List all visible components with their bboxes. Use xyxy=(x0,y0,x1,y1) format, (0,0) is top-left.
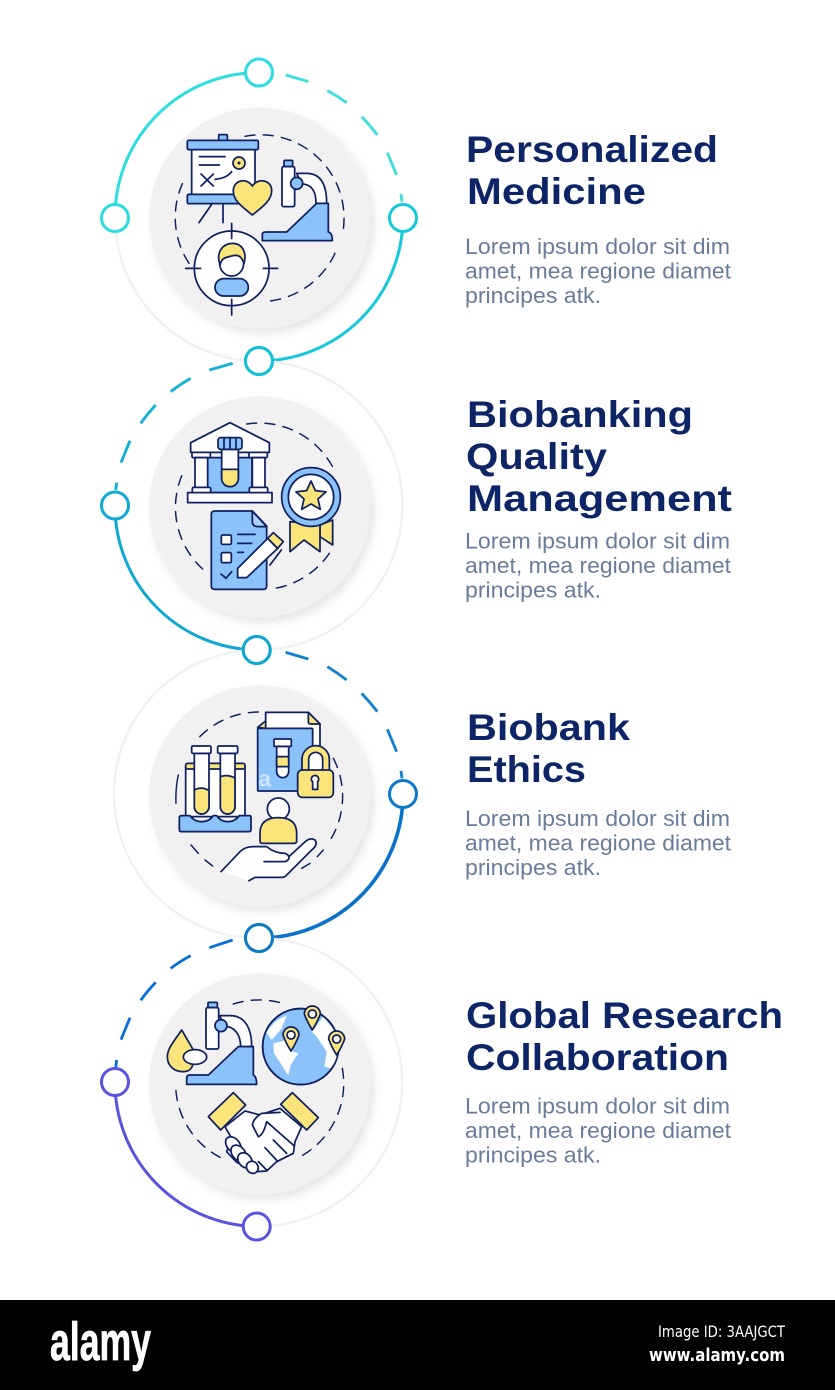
step 2 dashed arc xyxy=(116,363,233,490)
heading: Biobanking Quality Management: Quality xyxy=(466,436,607,477)
heading: Global Research Collaboration xyxy=(466,995,783,1078)
heading: Biobank Ethics: Ethics xyxy=(467,749,586,790)
text block: step 4 description xyxy=(465,1094,731,1168)
heading: Global Research Collaboration: Global Research xyxy=(466,995,783,1036)
watermark fragment: a xyxy=(258,766,271,792)
step 2: biobanking ring and icon xyxy=(102,348,402,664)
step 4 solid arc xyxy=(115,1082,257,1226)
heading: Biobank Ethics: Biobank xyxy=(467,707,630,748)
heading: Personalized Medicine: Medicine xyxy=(467,171,646,212)
step 1 solid arcs xyxy=(115,72,403,361)
icon: personalized medicine xyxy=(175,135,344,315)
heading: Biobanking Quality Management: Management xyxy=(467,478,732,519)
text block: step 3 description xyxy=(465,806,731,880)
text block: step 1 description xyxy=(465,234,731,308)
text block: step 1 description: amet, mea regione diamet xyxy=(465,258,731,284)
step 1 dashed arc xyxy=(286,75,402,202)
text block: step 2 description: amet, mea regione diamet xyxy=(465,553,731,578)
icon: global research collaboration xyxy=(167,1000,345,1176)
footer band xyxy=(0,1300,835,1390)
step 4 nodes xyxy=(102,924,272,1240)
text block: step 2 description: principes atk. xyxy=(465,578,601,602)
footer logo: alamy xyxy=(50,1312,151,1372)
heading: Personalized Medicine xyxy=(466,129,718,212)
text block: step 4 description: amet, mea regione diamet xyxy=(465,1118,731,1143)
heading: Biobanking Quality Management: Biobanking xyxy=(467,394,693,435)
step 3 dashed arc xyxy=(286,652,402,778)
text block: step 3 description: principes atk. xyxy=(465,855,601,880)
step 4 disc xyxy=(149,974,370,1194)
text block: step 3 description: amet, mea regione diamet xyxy=(465,830,731,856)
text block: step 4 description: principes atk. xyxy=(465,1142,601,1168)
heading: Biobank Ethics xyxy=(467,707,630,790)
icon: biobanking quality xyxy=(175,423,340,589)
step 2 solid arc xyxy=(115,506,257,650)
text block: step 2 description: Lorem ipsum dolor sit dim xyxy=(465,528,730,554)
text block: step 1 description: Lorem ipsum dolor sit dim xyxy=(465,234,730,259)
heading: Biobanking Quality Management xyxy=(466,394,732,519)
text block: step 1 description: principes atk. xyxy=(465,283,601,308)
step 4 dashed arc xyxy=(116,940,233,1068)
step 2 disc xyxy=(149,396,370,618)
icon: biobank ethics xyxy=(176,712,343,881)
step 3 disc xyxy=(149,686,370,906)
text block: step 4 description: Lorem ipsum dolor sit dim xyxy=(465,1094,730,1118)
footer url: www.alamy.com xyxy=(649,1345,785,1366)
text block: step 3 description: Lorem ipsum dolor sit dim xyxy=(465,806,730,831)
heading: Global Research Collaboration: Collaboration xyxy=(466,1037,729,1078)
step 3 solid arc xyxy=(259,794,403,938)
step 3 nodes xyxy=(243,636,416,952)
step 1 nodes xyxy=(102,59,416,374)
step 4: global collaboration ring and icon xyxy=(102,924,402,1240)
footer image id: Image ID: 3AAJGCT xyxy=(658,1322,785,1341)
step 1: personalized medicine ring and icon xyxy=(102,59,416,374)
step 3: biobank ethics ring and icon xyxy=(114,636,417,952)
text block: step 2 description xyxy=(465,528,731,602)
heading: Personalized Medicine: Personalized xyxy=(466,129,718,170)
step 2 nodes xyxy=(102,348,272,664)
step 1 disc xyxy=(149,108,370,328)
